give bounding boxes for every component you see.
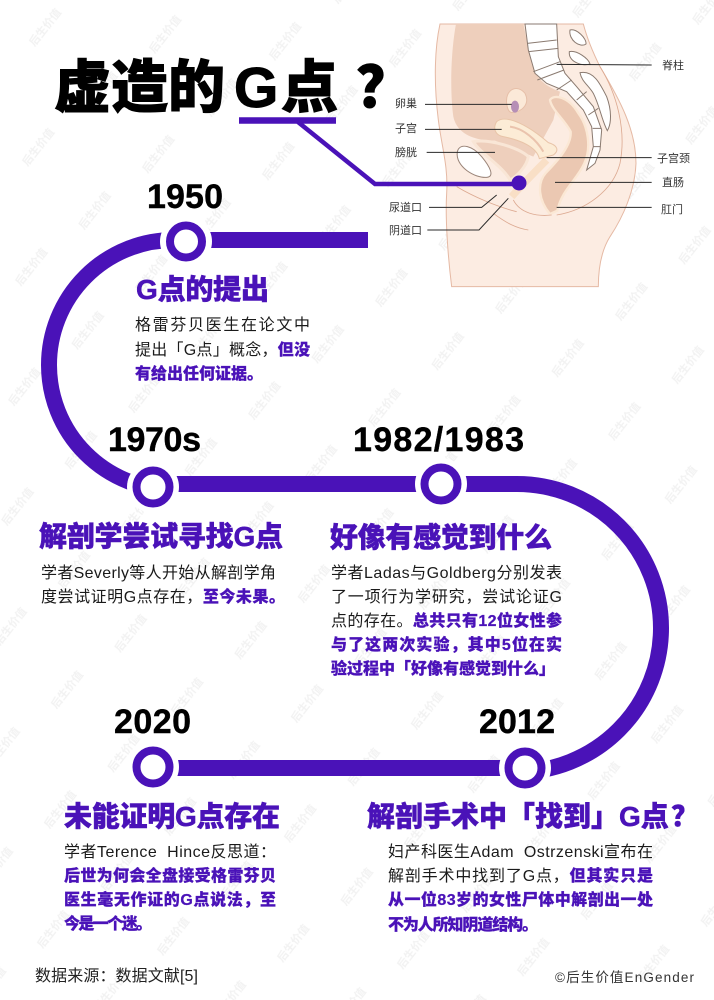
body text xyxy=(64,843,276,933)
bladder xyxy=(473,141,528,180)
body text: 学者Ladas与Goldberg分别发表 xyxy=(331,564,562,582)
label: spine: 脊柱 xyxy=(662,58,684,72)
label: rectum: 直肠 xyxy=(662,175,684,189)
heading: G点 xyxy=(619,801,669,832)
abdominal cavity xyxy=(451,24,560,157)
node 1950 xyxy=(160,216,212,268)
ovary follicle xyxy=(511,101,519,113)
body text: 今是一个迷。 xyxy=(64,914,152,933)
node 2012 xyxy=(499,742,551,794)
year 1982/1983: 1982/1983 xyxy=(353,421,524,459)
body text: 解剖手术中找到了G点，但其实只是 xyxy=(388,866,653,885)
title: G xyxy=(234,56,278,120)
panel: 2020 xyxy=(64,703,280,933)
body text: 学者Terence Hince反思道： xyxy=(64,843,276,861)
anatomy illustration: pelvic cross-section xyxy=(425,24,652,287)
anatomy labels xyxy=(389,58,690,237)
timeline track xyxy=(49,240,661,772)
label: uterus: 子宫 xyxy=(395,121,417,135)
heading: 未能证明G点存在 xyxy=(64,801,280,832)
panel: 1950 xyxy=(135,178,310,383)
heading: 好像有感觉到什么 xyxy=(330,521,552,553)
body text: 格雷芬贝医生在论文中 xyxy=(135,316,310,334)
node 1982/1983 xyxy=(415,458,467,510)
rectum xyxy=(540,97,588,214)
label: urethral opening: 尿道口 xyxy=(389,200,422,214)
label: cervix: 子宫颈 xyxy=(657,151,690,165)
uterus xyxy=(495,119,557,159)
body text: 有给出任何证据。 xyxy=(135,364,263,383)
body text: 妇产科医生Adam Ostrzenski宣布在 xyxy=(388,843,653,861)
pelvic contour lines xyxy=(457,67,622,230)
body text: 验过程中「好像有感觉到什么」 xyxy=(331,659,555,678)
title: ？ xyxy=(356,56,413,120)
heading: ？ xyxy=(671,801,699,832)
body text xyxy=(41,564,285,606)
heading: G点的提出 xyxy=(136,274,269,305)
node 2020 xyxy=(127,741,179,793)
year 1970s: 1970s xyxy=(108,421,201,459)
leader lines xyxy=(425,64,652,230)
body text: 与了这两次实验，其中5位在实 xyxy=(331,635,562,654)
credit: ©后生价值EnGender xyxy=(555,970,694,985)
body text xyxy=(135,316,310,383)
body text: 提出「G点」概念，但没 xyxy=(135,340,310,359)
node 1970s xyxy=(127,461,179,513)
body text: 学者Severly等人开始从解剖学角 xyxy=(41,564,276,582)
body text xyxy=(388,843,653,934)
body text: 后世为何会全盘接受格雷芬贝 xyxy=(64,866,276,885)
panel: 1970s xyxy=(39,421,285,606)
year 2020: 2020 xyxy=(114,703,191,741)
timeline nodes xyxy=(127,216,551,794)
body text: 点的存在。总共只有12位女性参 xyxy=(331,611,562,630)
title: 虚造的 xyxy=(54,56,225,120)
spine xyxy=(525,24,602,170)
data source note: 数据来源：数据文献[5] xyxy=(35,967,198,985)
G-spot pointer line from title to diagram xyxy=(239,120,526,190)
body text xyxy=(331,564,562,678)
body text: 了一项行为学研究，尝试论证G xyxy=(331,588,562,606)
label: ovary: 卵巢 xyxy=(395,97,417,110)
body text: 不为人所知阴道结构。 xyxy=(388,915,538,934)
year 1950: 1950 xyxy=(147,178,223,216)
body silhouette xyxy=(435,24,636,287)
vaginal canal xyxy=(512,160,547,197)
body text: 从一位83岁的女性尸体中解剖出一处 xyxy=(388,890,653,909)
vertebra separators and sacral bones xyxy=(527,30,611,147)
label: anus: 肛门 xyxy=(661,202,683,216)
panel: 1982/1983 xyxy=(330,421,562,678)
uterine cavity xyxy=(510,127,543,152)
title: 点 xyxy=(281,56,338,120)
body text: 医生毫无作证的G点说法，至 xyxy=(64,890,276,909)
heading: 解剖手术中「找到」 xyxy=(367,800,619,832)
body text: 度尝试证明G点存在，至今未果。 xyxy=(41,587,285,606)
ovary xyxy=(507,89,527,113)
heading: 解剖学尝试寻找G点 xyxy=(39,520,283,552)
label: bladder: 膀胱 xyxy=(395,145,417,159)
year 2012: 2012 xyxy=(479,703,555,741)
panel: 2012 xyxy=(367,703,699,934)
label: vaginal opening: 阴道口 xyxy=(389,223,422,237)
pubic bone xyxy=(457,146,491,177)
